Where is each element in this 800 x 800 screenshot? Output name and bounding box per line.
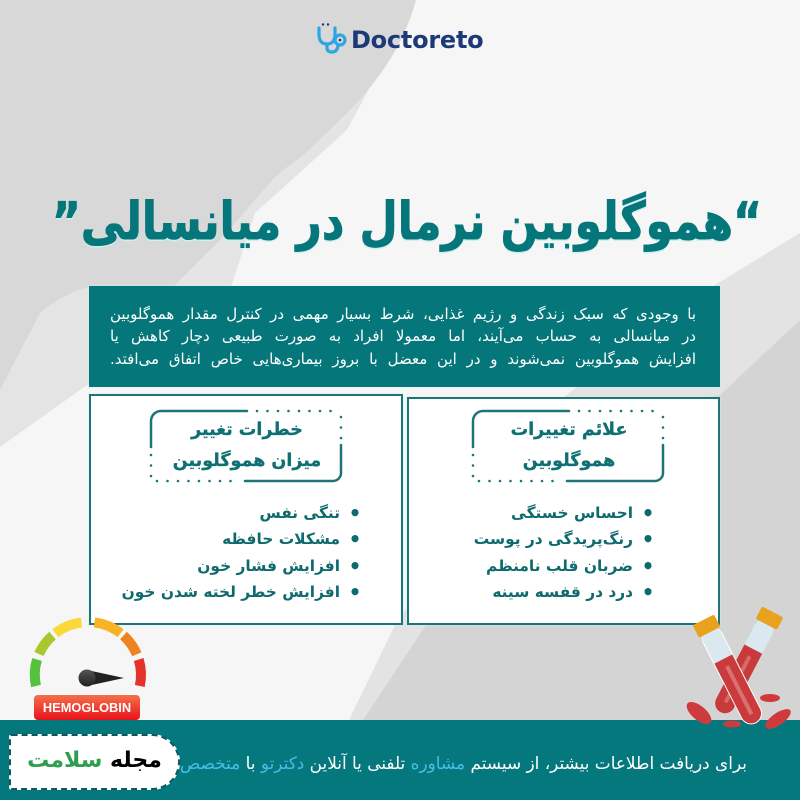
gauge label: HEMOGLOBIN [43,700,131,715]
list: risks: تنگی نفس [259,504,340,522]
badge: health magazine [9,734,180,790]
list: risks: افزایش خطر لخته شدن خون [122,583,340,601]
heading: symptoms: علائم تغییرات [511,420,627,440]
list: symptoms [474,504,652,601]
intro text block: افزایش هموگلوبین نمی‌شوند و در این معضل با بروز بیماری‌هایی خاص اتفاق می‌افتد. [110,350,696,368]
intro text block: با وجودی که سبک زندگی و رژیم غذایی، شرط بسیار مهمی در کنترل مقدار هموگلوبین [110,305,696,323]
front tube [693,614,767,729]
panel: risks [89,394,403,625]
footer text: برای دریافت اطلاعات بیشتر، از سیستم مشاوره تلفنی یا آنلاین دکترتو با متخصص [181,753,747,773]
heading frame: risks [150,410,342,482]
intro text block: در میانسالی به حساب می‌آیند، اما معمولا افراد به صورت طبیعی دچار کاهش یا [110,327,696,345]
heading: risks: خطرات تغییر [191,420,303,440]
gauge needle [78,670,124,686]
gauge arcs [35,622,141,686]
title: “هموگلوبین نرمال در میانسالی” [52,192,762,252]
list: risks: افزایش فشار خون [197,557,340,575]
heading frame: symptoms [472,410,664,482]
icon: stethoscope [317,23,347,54]
list: risks [122,504,358,601]
logo: Doctoreto [317,23,483,54]
list: risks: مشکلات حافظه [222,530,340,548]
badge: health magazine: مجله سلامت [27,748,162,773]
heading: symptoms: هموگلوبین [523,451,615,471]
icon: blood test tubes [686,607,791,729]
heading: risks: میزان هموگلوبین [173,451,321,471]
list: symptoms: رنگ‌پریدگی در پوست [474,530,633,548]
intro text block [89,286,720,387]
list: symptoms: احساس خستگی [511,504,633,522]
list: symptoms: درد در قفسه سینه [492,583,633,601]
heading: risks [173,420,321,471]
panel: symptoms [407,397,720,625]
back tube [710,606,783,718]
footer band [0,720,800,800]
list: symptoms: ضربان قلب نامنظم [486,557,633,575]
heading: symptoms [511,420,627,471]
gauge: hemoglobin [30,618,146,720]
logo wordmark: Doctoreto [351,26,483,54]
blood cells [683,694,794,733]
